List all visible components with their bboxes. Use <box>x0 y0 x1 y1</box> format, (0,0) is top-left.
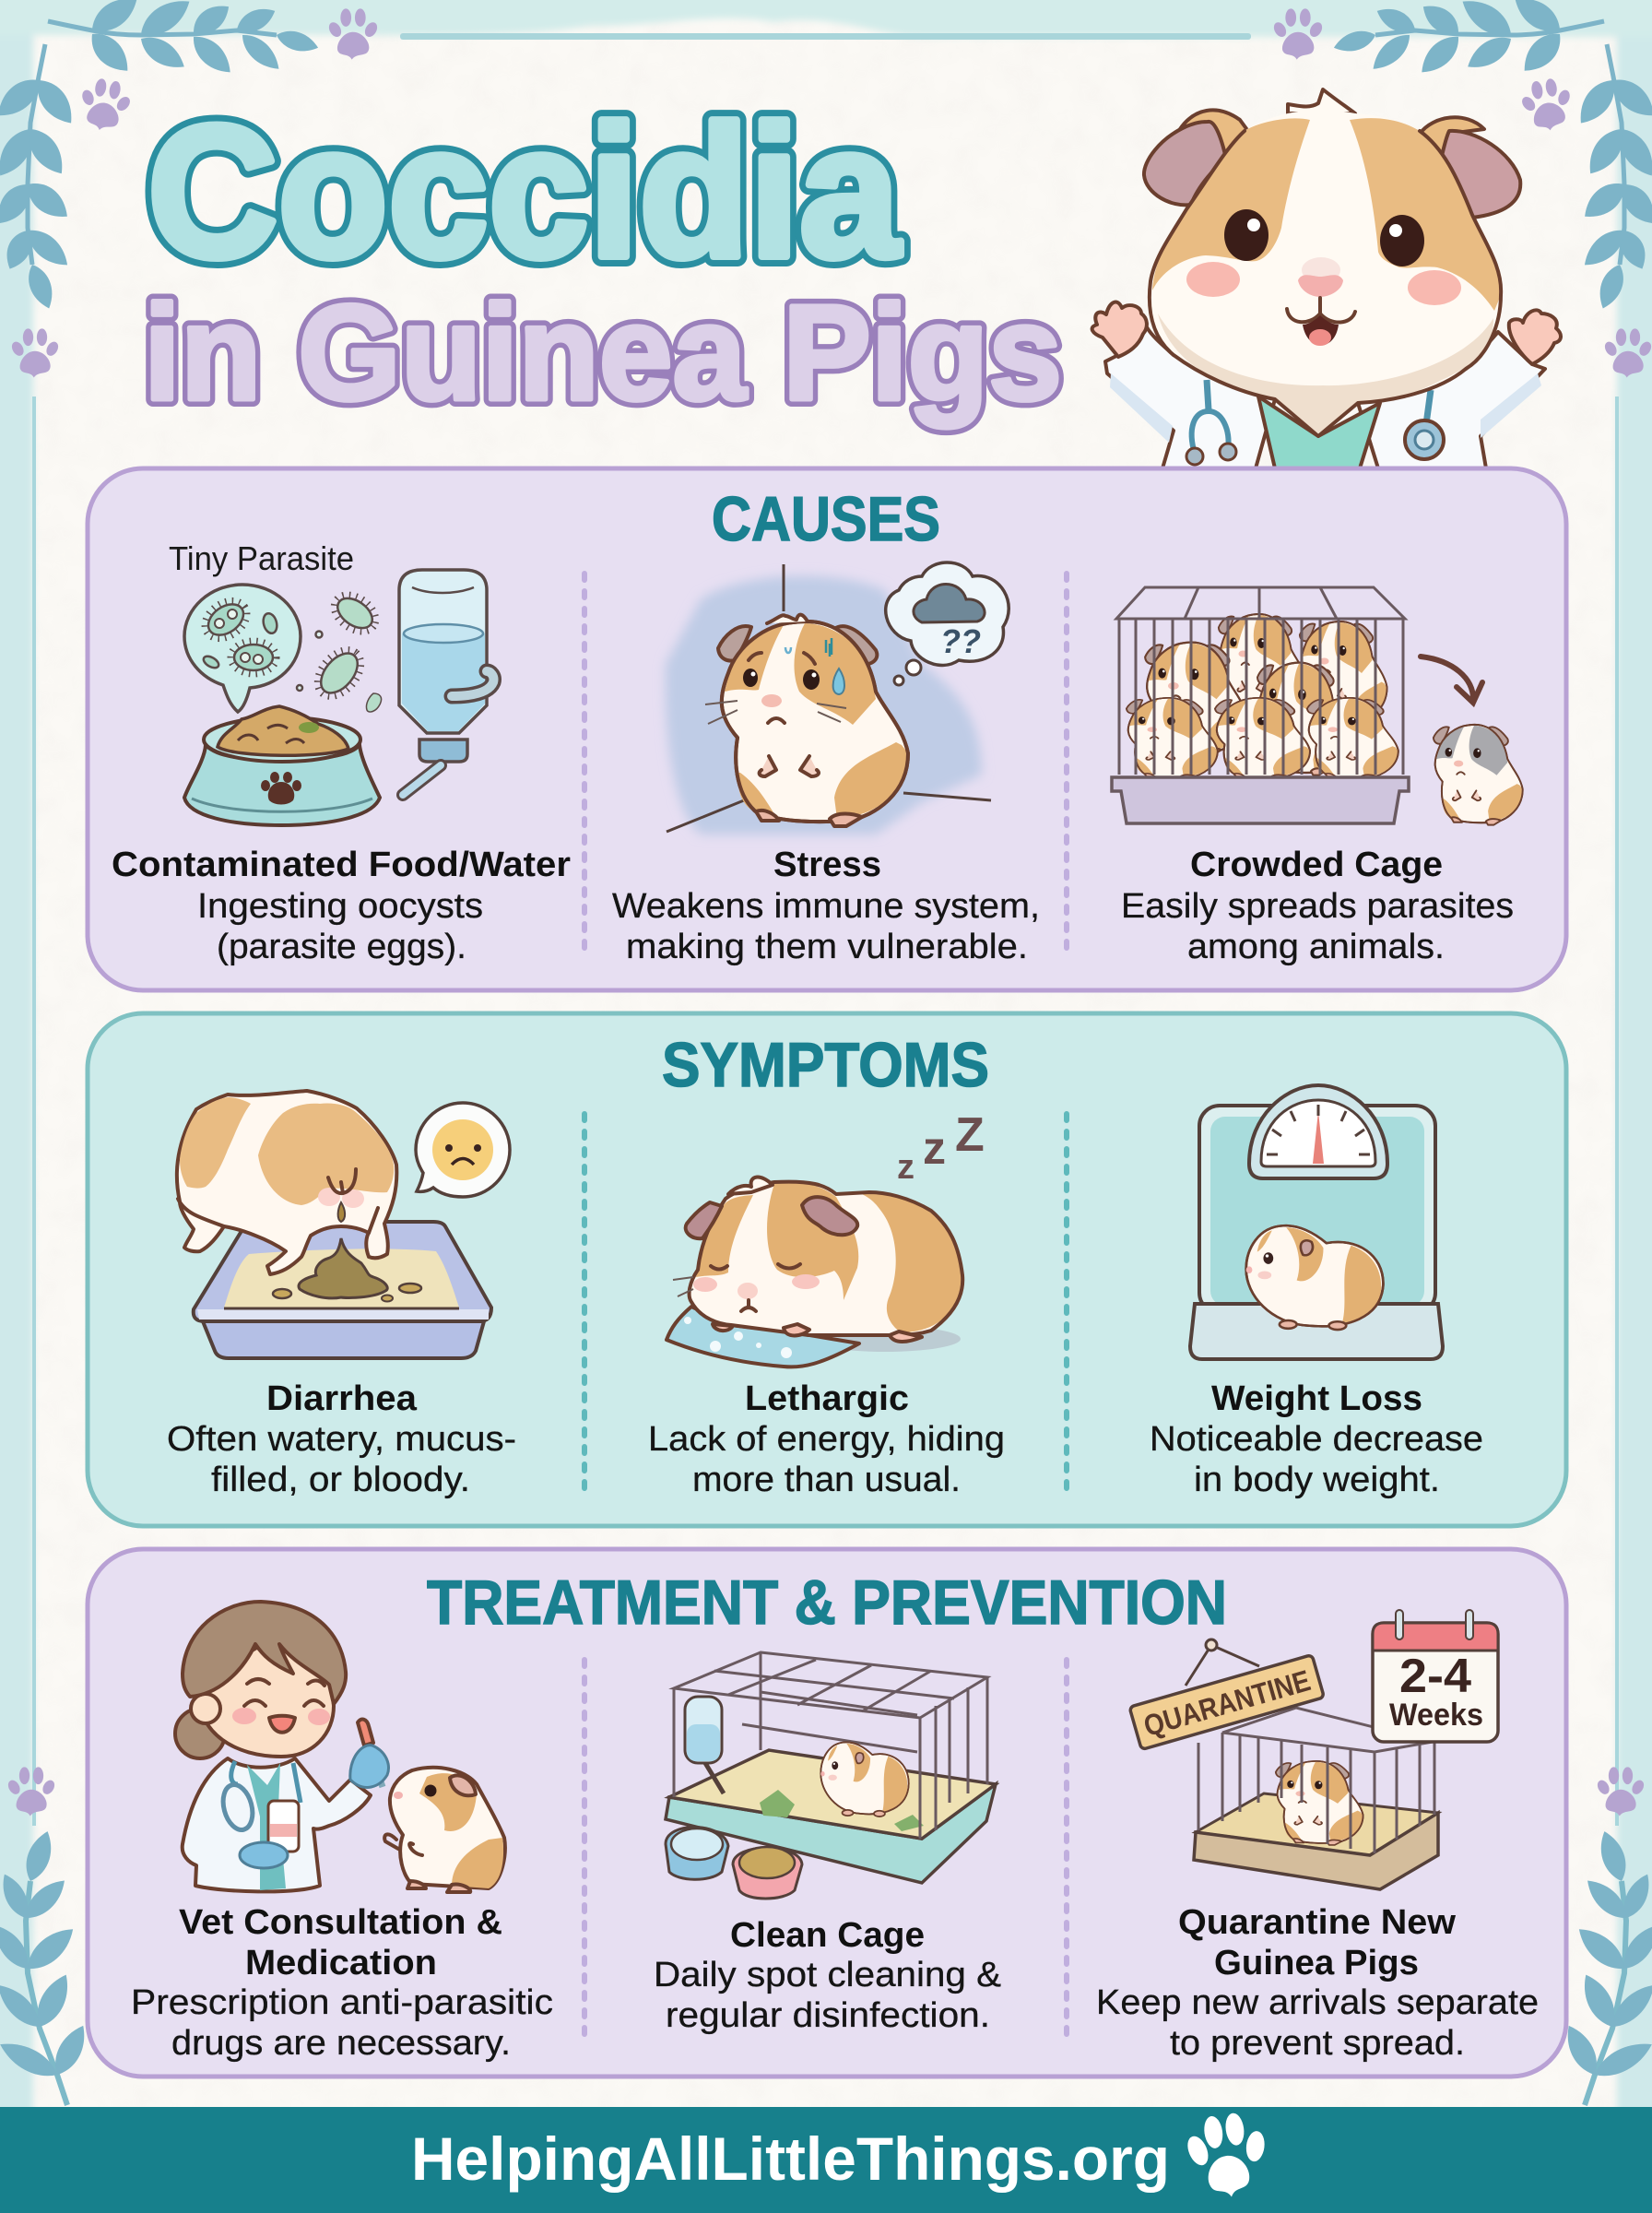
sleep Zs: Z <box>955 1108 985 1162</box>
text: crowded cage: among animals. <box>1187 928 1445 966</box>
hair <box>183 1602 346 1704</box>
symptoms background <box>88 1013 1566 1526</box>
icon: vet with medication and guinea pig <box>175 1602 505 1892</box>
water bottle <box>399 570 493 795</box>
thought bubble: ?? <box>940 622 981 660</box>
symptoms heading: SYMPTOMS <box>662 1030 989 1100</box>
hair bun <box>175 1709 225 1758</box>
water bottle <box>685 1697 724 1793</box>
cage bars <box>1198 1708 1434 1853</box>
ears <box>1144 110 1520 218</box>
text: quarantine new guinea pigs: Guinea Pigs <box>1214 1944 1419 1982</box>
speech bubble with parasites <box>184 585 301 712</box>
sleep Zs: z <box>923 1122 946 1174</box>
text: vet consultation: Prescription anti-parasitic <box>131 1983 553 2022</box>
text: clean cage: Daily spot cleaning & <box>654 1956 1001 1994</box>
stethoscope <box>218 1761 301 1833</box>
icon: stressed guinea pig in corner <box>666 562 1009 834</box>
text: clean cage <box>654 1916 1001 2035</box>
icon: diarrhea in litter tray <box>177 1091 510 1358</box>
raised hands <box>1092 302 1561 364</box>
sleep Zs <box>897 1108 985 1187</box>
calendar: 2-4 <box>1399 1650 1471 1703</box>
litter tray <box>194 1222 491 1358</box>
text: crowded cage <box>1121 846 1514 966</box>
calendar <box>1373 1610 1498 1742</box>
text: crowded cage: Easily spreads parasites <box>1121 887 1514 926</box>
text: diarrhea: filled, or bloody. <box>211 1461 470 1499</box>
text: vet consultation: drugs are necessary. <box>171 2024 511 2063</box>
head outline <box>1150 131 1501 436</box>
title <box>144 87 1062 429</box>
icon: footer paw <box>1181 2109 1274 2202</box>
causes heading: CAUSES <box>712 484 940 554</box>
pink bowl <box>733 1847 802 1899</box>
footer website text: HelpingAllLittleThings.org <box>411 2124 1170 2193</box>
chin shading <box>1158 314 1493 433</box>
text: clean cage: regular disinfection. <box>666 1996 990 2035</box>
text: vet consultation <box>131 1903 553 2063</box>
calendar: Weeks <box>1389 1698 1483 1733</box>
text: weight loss <box>1150 1379 1483 1499</box>
face <box>198 1641 334 1757</box>
doctor coat and scrubs <box>1105 327 1545 468</box>
quarantine sign: QUARANTINE <box>1140 1663 1314 1743</box>
text: contaminated food/water: (parasite eggs). <box>217 928 466 966</box>
tuft, brows, whiskers and sweat <box>705 615 846 724</box>
left side line <box>32 396 36 1826</box>
sleep Zs: z <box>897 1148 914 1187</box>
quarantine sign <box>1129 1639 1324 1749</box>
panel: symptoms <box>88 1013 1566 1526</box>
pillow <box>667 1307 859 1367</box>
text: stress: making them vulnerable. <box>626 928 1028 966</box>
mascot: guinea pig doctor <box>1092 89 1561 468</box>
free parasites <box>297 587 383 712</box>
text: clean cage: Clean Cage <box>730 1916 925 1955</box>
face <box>1186 209 1461 346</box>
guinea pig rear view <box>177 1091 396 1274</box>
guinea pig <box>384 1768 505 1892</box>
label: tiny parasite: Tiny Parasite <box>169 539 354 577</box>
icon: crowded cage <box>1112 587 1523 825</box>
text: crowded cage: Crowded Cage <box>1190 846 1443 884</box>
ear <box>191 1694 220 1723</box>
text: vet consultation: Vet Consultation & <box>179 1903 502 1942</box>
text: diarrhea <box>167 1379 516 1499</box>
sad face bubble <box>416 1103 510 1197</box>
floor shadow <box>809 1326 961 1352</box>
head <box>1150 110 1501 436</box>
title line one: Coccidia <box>148 87 901 297</box>
text: stress <box>612 846 1040 966</box>
facial features <box>232 1679 330 1733</box>
icon: weighing scale <box>1190 1085 1443 1359</box>
text: weight loss: Noticeable decrease <box>1150 1420 1483 1459</box>
quarantine tray <box>1194 1793 1438 1889</box>
fur patches <box>1152 118 1501 311</box>
text: lethargic: Lethargic <box>745 1379 909 1418</box>
panel: causes <box>88 468 1566 990</box>
text: weight loss: Weight Loss <box>1211 1379 1422 1418</box>
tray <box>666 1750 996 1883</box>
treatment background <box>88 1549 1566 2077</box>
panel: treatment and prevention <box>88 1549 1566 2077</box>
icon: lethargic sleeping guinea pig <box>667 1108 985 1367</box>
tuft <box>1288 89 1355 113</box>
causes background <box>88 468 1566 990</box>
food bowl <box>184 706 380 825</box>
title line two: in Guinea Pigs <box>144 278 1062 429</box>
thought bubble <box>886 562 1009 685</box>
lone guinea pig <box>1434 725 1523 825</box>
top divider line <box>400 33 1251 40</box>
text: lethargic <box>648 1379 1005 1499</box>
vet coat <box>183 1758 371 1891</box>
medicine bottle and glove <box>240 1801 299 1868</box>
treatment heading: TREATMENT & PREVENTION <box>427 1568 1227 1638</box>
blue bowl <box>666 1827 728 1879</box>
text: stress: Weakens immune system, <box>612 887 1040 926</box>
icon: quarantine cage with sign and calendar <box>1129 1610 1498 1889</box>
text: lethargic: Lack of energy, hiding <box>648 1420 1005 1459</box>
text: contaminated food/water <box>112 846 571 966</box>
icon: clean cage <box>666 1652 996 1899</box>
poop <box>299 1238 387 1298</box>
text: quarantine new guinea pigs: Quarantine New <box>1178 1903 1456 1942</box>
title line two: in Guinea Pigs <box>144 278 1062 429</box>
cage wire <box>674 1652 987 1839</box>
text: diarrhea: Diarrhea <box>266 1379 418 1418</box>
arrow <box>1421 657 1482 703</box>
right side line <box>1615 396 1619 1826</box>
text: weight loss: in body weight. <box>1194 1461 1440 1499</box>
text: diarrhea: Often watery, mucus- <box>167 1420 516 1459</box>
dropper and glove <box>350 1720 388 1787</box>
text: quarantine new guinea pigs: Keep new arrivals separate <box>1096 1983 1539 2022</box>
text: lethargic: more than usual. <box>692 1461 961 1499</box>
text: contaminated food/water: Ingesting oocysts <box>197 887 483 926</box>
dial <box>1249 1085 1387 1178</box>
text: quarantine new guinea pigs <box>1096 1903 1539 2063</box>
cage tray <box>1112 777 1409 823</box>
footer band <box>0 2107 1652 2213</box>
cage bars <box>1116 587 1405 775</box>
title line one: Coccidia <box>148 87 901 297</box>
icon: contaminated bowl, parasites and water bottle <box>169 539 493 825</box>
text: vet consultation: Medication <box>245 1944 437 1982</box>
sleeping body <box>673 1178 962 1342</box>
text: contaminated food/water: Contaminated Food/Water <box>112 846 571 884</box>
cage guinea pigs <box>1127 614 1398 780</box>
text: quarantine new guinea pigs: to prevent spread. <box>1170 2024 1465 2063</box>
scrubs <box>247 1763 286 1890</box>
text: stress: Stress <box>773 846 881 884</box>
